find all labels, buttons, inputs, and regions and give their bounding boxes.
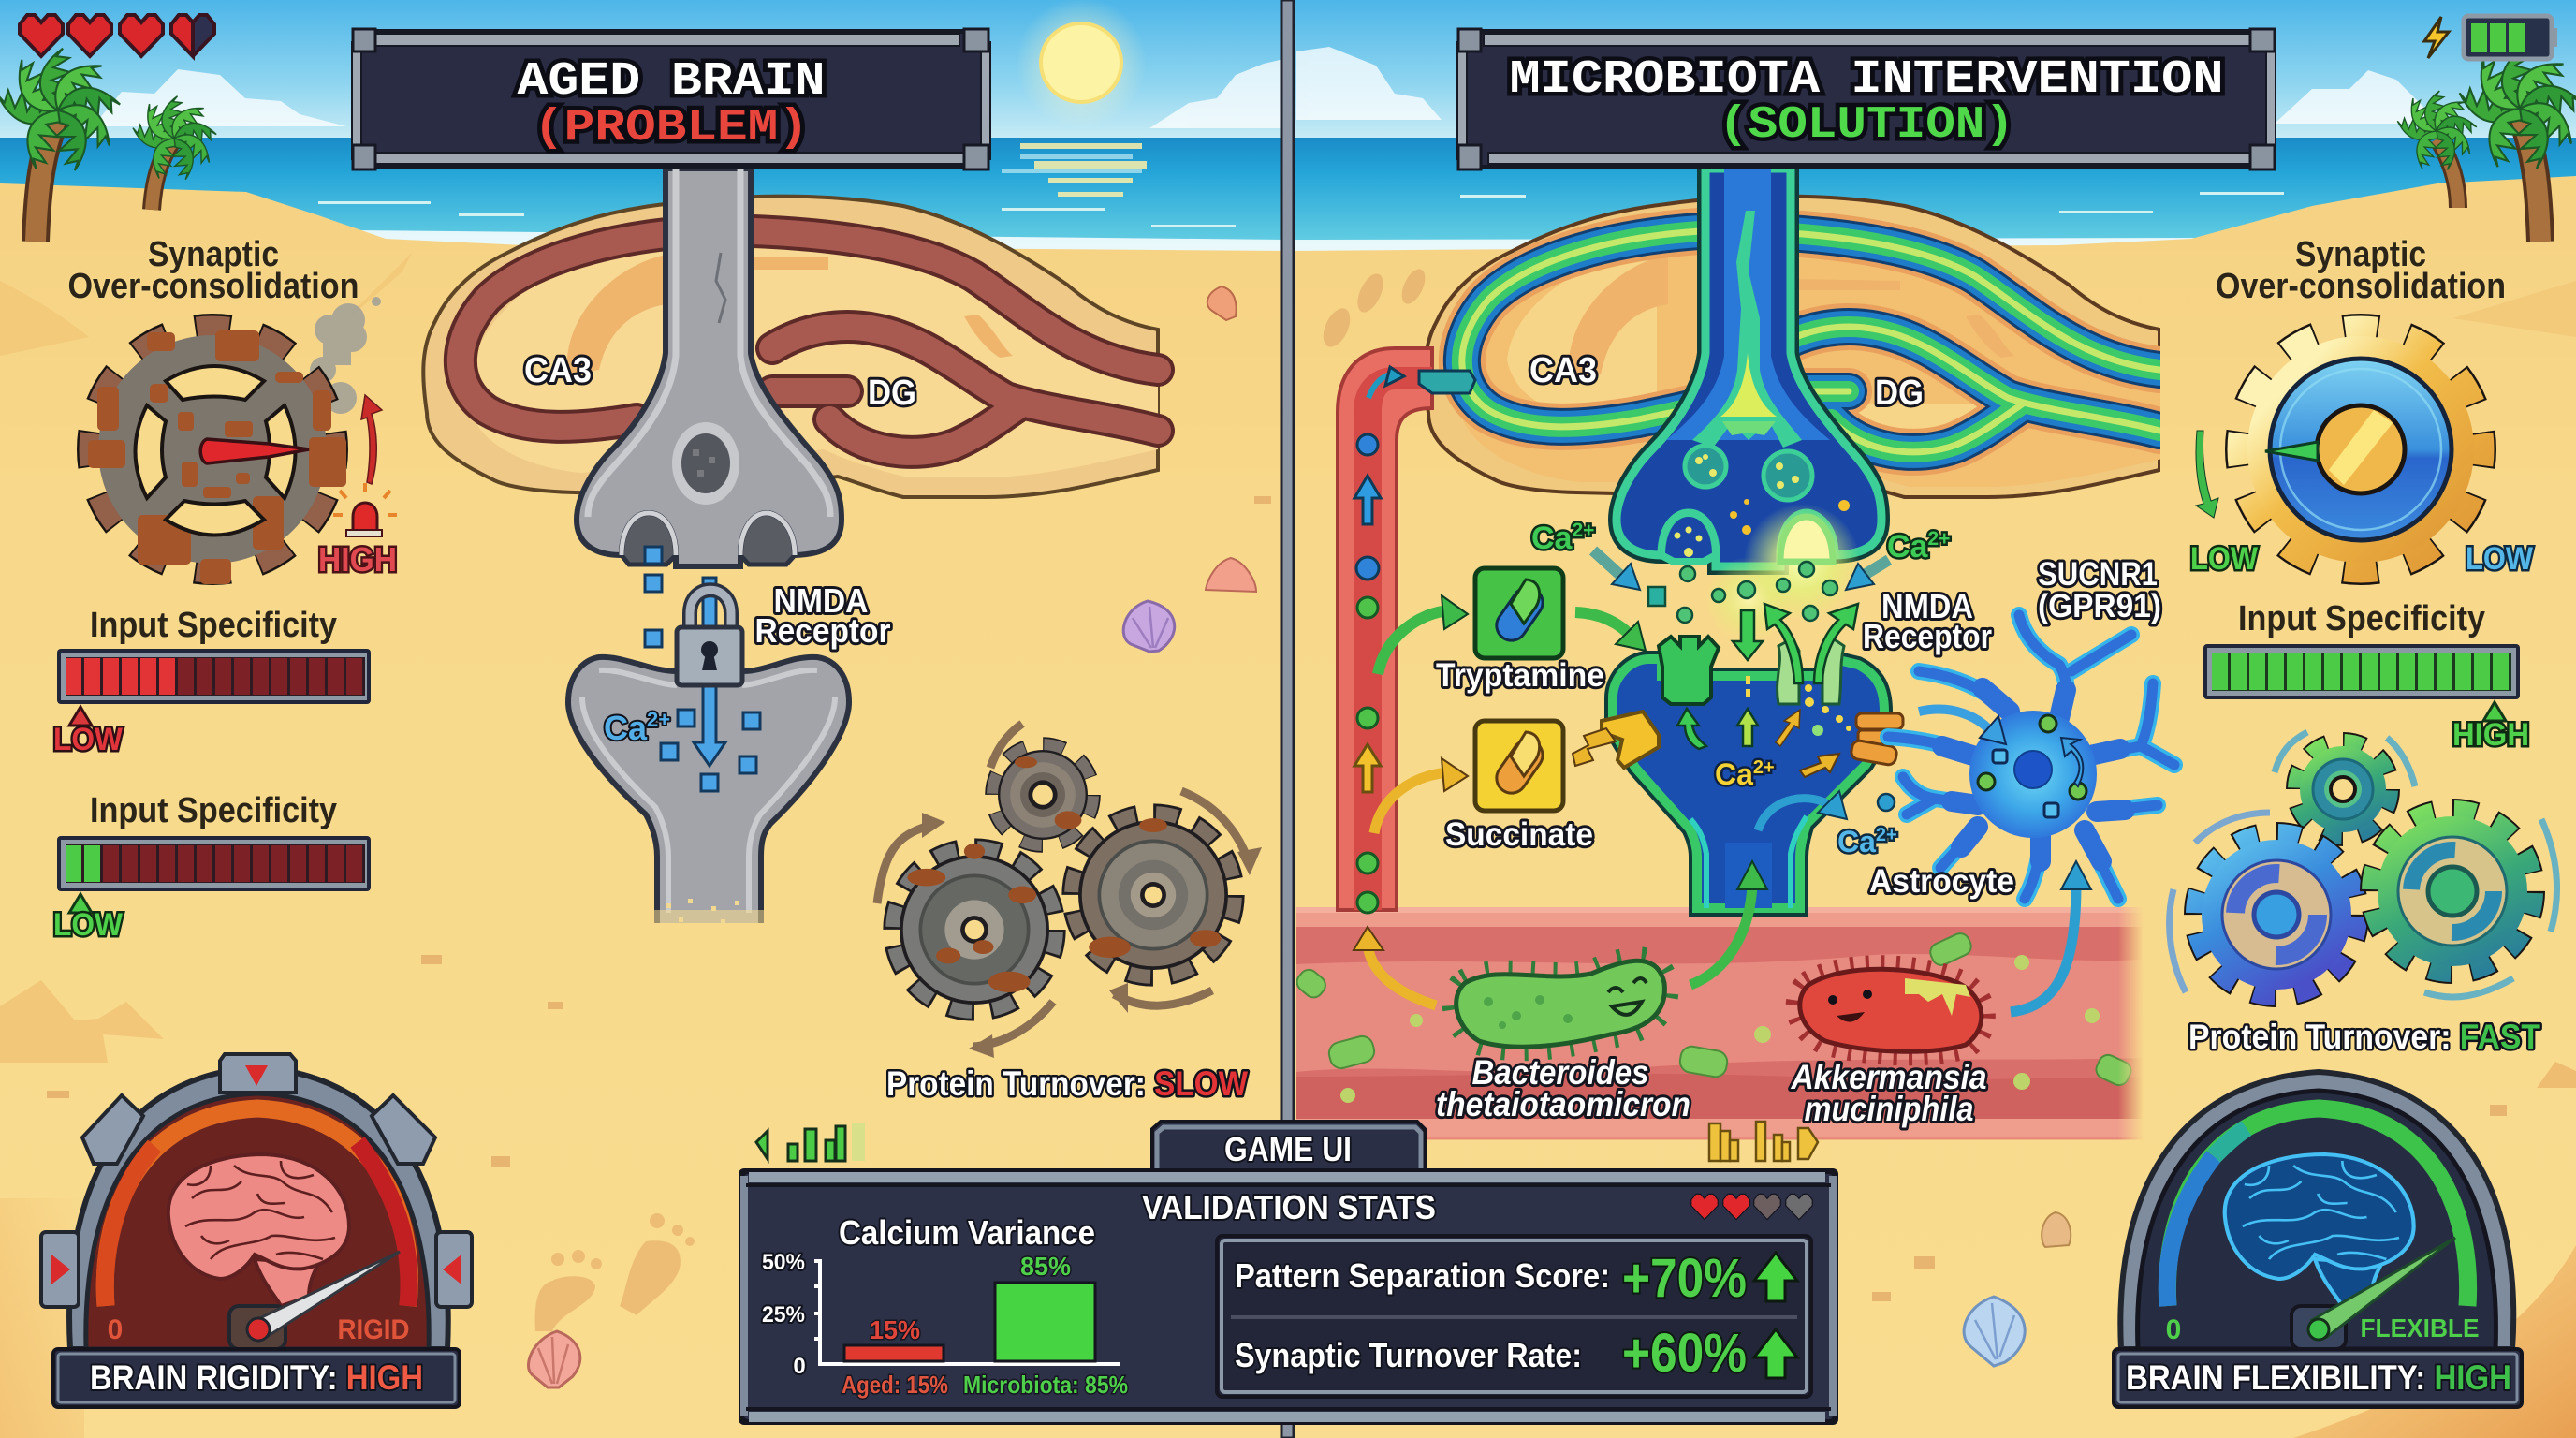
calcium dot xyxy=(1878,794,1895,811)
gauge: brain flexibility xyxy=(2120,1072,2513,1349)
icon: rusty gauge gear left xyxy=(88,327,346,584)
astrocyte xyxy=(1888,615,2174,899)
icon: green sound bars xyxy=(756,1123,865,1161)
label: Akkermansia muciniphila xyxy=(1791,1058,1986,1128)
arrows: calcium into synapse xyxy=(1593,550,1889,590)
label: Bacteroides thetaiotaomicron: thetaiotaomicron xyxy=(1436,1085,1690,1123)
label: Ca2+ green right: Ca xyxy=(1887,529,1927,565)
tab: GAME UI xyxy=(1152,1122,1425,1170)
presynaptic terminal: restored blue xyxy=(1617,169,1881,566)
label: Synaptic Over-consolidation right: Synaptic xyxy=(2295,235,2426,274)
label: Ca2+ green left: Ca xyxy=(1531,521,1572,556)
sub-heading: PROBLEM: (PROBLEM) xyxy=(534,103,809,154)
label: Succinate: Succinate xyxy=(1445,816,1593,853)
icon: padlock xyxy=(677,590,742,685)
icon: pink shell middle xyxy=(1206,558,1256,592)
panel: score box: Synaptic Turnover Rate: xyxy=(1235,1336,1582,1374)
yellow-orange receptor cluster xyxy=(1602,712,1903,768)
label: Tryptamine: Tryptamine xyxy=(1436,657,1604,694)
label: Input Specificity 2: Input Specificity xyxy=(90,791,337,830)
arrow: green down xyxy=(2196,431,2218,518)
heading: AGED BRAIN: AGED BRAIN xyxy=(517,55,826,109)
icon: alarm siren xyxy=(333,483,397,536)
icon: pink brain xyxy=(168,1154,349,1306)
icon: glowing blue brain xyxy=(2225,1154,2414,1306)
label: Ca2+ left: Ca xyxy=(604,709,647,747)
panel: score box xyxy=(1217,1236,1811,1397)
gauge needle and scale labels flexible xyxy=(2166,1238,2479,1349)
arrow: yellow bacteria to vessel xyxy=(1354,927,1436,1005)
gauge needle and scale labels flexible: 0 xyxy=(2166,1314,2181,1345)
chart: calcium variance: 15% xyxy=(870,1315,920,1344)
label: NMDA Receptor left xyxy=(754,581,891,650)
marker and label: HIGH green xyxy=(2452,702,2529,753)
icon: orange shell top xyxy=(1208,286,1237,320)
arrows: green in synapse xyxy=(1677,604,1858,749)
label box: brain rigidity high: BRAIN RIGIDITY: HIGH xyxy=(90,1358,423,1397)
label: DG right: DG xyxy=(1875,374,1924,413)
vessel cargo: dots and arrows xyxy=(1354,367,1475,913)
bacterium: Akkermansia muciniphila xyxy=(1800,969,1982,1051)
label: Synaptic Over-consolidation right xyxy=(2216,235,2506,306)
hippocampus left xyxy=(423,197,1158,497)
label: SUCNR1 GPR91 xyxy=(2038,556,2161,624)
icon: succinate pill xyxy=(1475,721,1563,811)
label: Protein Turnover SLOW: Protein Turnover: SLOW xyxy=(886,1064,1248,1103)
icon: yellow sound bars xyxy=(1709,1122,1818,1161)
icon: pink shell bottom left xyxy=(528,1331,580,1387)
label: Synaptic Over-consolidation left: Synaptic xyxy=(148,235,279,274)
tab: GAME UI: GAME UI xyxy=(1224,1130,1352,1168)
icon: footprints right xyxy=(1318,266,1430,351)
arrow: small yellow to receptor xyxy=(1800,754,1839,777)
panel: score box: +60% xyxy=(1622,1323,1747,1384)
panel: validation stats xyxy=(739,1168,1838,1425)
bar: input specificity low green xyxy=(57,836,371,891)
label: Synaptic Over-consolidation left xyxy=(67,235,359,306)
label: HIGH left: HIGH xyxy=(318,540,397,579)
bar: input specificity high green xyxy=(2203,644,2520,699)
chart: calcium variance: 0 xyxy=(793,1354,806,1379)
icon: tryptamine pill xyxy=(1475,568,1563,658)
sun xyxy=(1016,0,1147,128)
synaptic glow and vesicle release xyxy=(1648,504,1860,641)
label box: brain flexibility high xyxy=(2114,1349,2522,1407)
label: Akkermansia muciniphila: Akkermansia xyxy=(1791,1058,1986,1096)
icon: footprints left xyxy=(535,1213,695,1331)
label: Input Specificity right: Input Specificity xyxy=(2238,599,2485,638)
title panel: microbiota intervention xyxy=(1457,29,2276,169)
label: DG left: DG xyxy=(868,374,916,413)
label: Bacteroides thetaiotaomicron: Bacteroides xyxy=(1471,1053,1649,1092)
gut lining with bacteria xyxy=(1294,910,2144,1138)
arrow: yellow up to channel xyxy=(1776,710,1800,746)
label: Ca2+ yellow in post-synapse: 2+ xyxy=(1753,757,1775,778)
gauge needle and scale labels flexible: FLEXIBLE xyxy=(2361,1313,2479,1343)
blood vessel xyxy=(1338,348,1432,910)
palm trees right xyxy=(2395,47,2576,242)
light green receptor channel xyxy=(1778,638,1844,704)
heading: MICROBIOTA INTERVENTION: MICROBIOTA INTERVENTION xyxy=(1509,53,2224,107)
presynaptic terminal: aged grey xyxy=(577,169,842,566)
arrow: green tryptamine to receptor xyxy=(1575,612,1646,651)
label: Ca2+ yellow in post-synapse: Ca xyxy=(1715,757,1753,791)
label box: brain rigidity high xyxy=(53,1349,460,1407)
label: Input Specificity 1: Input Specificity xyxy=(90,606,337,645)
label: Synaptic Over-consolidation right: Over-consolidation xyxy=(2216,267,2506,306)
chart: calcium variance: 85% xyxy=(1020,1252,1071,1281)
arrow: green bacteria to synapse xyxy=(1690,861,1767,985)
label: NMDA Receptor right xyxy=(1863,587,1992,655)
icon: purple shell xyxy=(1123,601,1175,652)
label: LOW green gear: LOW xyxy=(2190,541,2259,577)
postsynaptic terminal: aged grey xyxy=(568,657,849,934)
arrow: receptor to astrocyte xyxy=(1919,710,2006,744)
arrow: blue bacteria to astrocyte xyxy=(2011,861,2091,1012)
panel: score box: +70% xyxy=(1622,1248,1747,1309)
label: Protein Turnover FAST: Protein Turnover: FAST xyxy=(2188,1018,2540,1056)
label: Ca2+ green right: 2+ xyxy=(1927,528,1950,550)
center divider xyxy=(1281,0,1294,1438)
label: CA3 left: CA3 xyxy=(524,351,592,390)
bar: input specificity low red xyxy=(57,649,371,704)
arrow: yellow succinate to receptor xyxy=(1573,728,1616,766)
gauge needle and scale labels rigid: 0 xyxy=(108,1314,123,1345)
arrow: blue curve xyxy=(1758,791,1847,830)
label: NMDA Receptor left: Receptor xyxy=(754,611,891,650)
chart: calcium variance: Microbiota: 85% xyxy=(963,1371,1128,1399)
icon: hearts lives xyxy=(20,15,214,56)
label: Ca2+ blue: 2+ xyxy=(1876,825,1897,845)
title panel: aged brain xyxy=(352,29,990,169)
icon: tan rock xyxy=(2042,1212,2071,1247)
hippocampus right xyxy=(1425,197,2162,497)
chart: calcium variance xyxy=(762,1213,1128,1399)
icon: blue shell bottom xyxy=(1964,1297,2025,1366)
label box: brain flexibility high: BRAIN FLEXIBILITY: HIGH xyxy=(2126,1358,2511,1397)
label: CA3 right: CA3 xyxy=(1530,351,1597,390)
panel: score box: Pattern Separation Score: xyxy=(1235,1256,1610,1295)
green receptor xyxy=(1659,637,1719,704)
marker and label: LOW red: LOW xyxy=(53,722,124,757)
icon: golden gauge gear right xyxy=(2238,327,2483,572)
icon: smoke xyxy=(282,297,381,432)
icon: stat hearts xyxy=(1691,1194,1812,1220)
icon: rusty turnover gears xyxy=(877,724,1262,1058)
gauge needle and scale labels rigid: RIGID xyxy=(337,1314,410,1345)
marker and label: LOW red xyxy=(53,707,124,757)
gauge needle and scale labels rigid xyxy=(108,1252,410,1349)
arrow: yellow to succinate xyxy=(1374,758,1468,833)
chart: calcium variance: Aged: 15% xyxy=(842,1371,948,1399)
label: NMDA Receptor right: NMDA xyxy=(1881,587,1973,625)
chart: calcium variance: 25% xyxy=(762,1302,805,1328)
marker and label: LOW green: LOW xyxy=(53,907,124,943)
icon: battery and bolt xyxy=(2424,16,2557,59)
label: Bacteroides thetaiotaomicron xyxy=(1436,1053,1690,1123)
bacterium: Bacteroides thetaiotaomicron xyxy=(1456,961,1664,1047)
heading: VALIDATION STATS: VALIDATION STATS xyxy=(1142,1188,1436,1226)
label: Ca2+ green left: 2+ xyxy=(1572,520,1594,541)
blue ion arrow and calcium particles, aged xyxy=(645,547,760,791)
label: NMDA Receptor left: NMDA xyxy=(773,581,869,620)
label: Ca2+ blue: Ca xyxy=(1837,825,1876,858)
label: Astrocyte: Astrocyte xyxy=(1869,863,2014,900)
gauge: brain rigidity xyxy=(41,1054,472,1349)
label: SUCNR1 GPR91: SUCNR1 xyxy=(2038,556,2158,593)
marker and label: HIGH green: HIGH xyxy=(2452,717,2529,753)
label: LOW blue gear: LOW xyxy=(2466,541,2534,577)
sub-heading: SOLUTION: (SOLUTION) xyxy=(1719,100,2014,151)
palm trees left xyxy=(0,49,217,242)
icon: healthy turnover gears xyxy=(2170,732,2557,997)
label: SUCNR1 GPR91: (GPR91) xyxy=(2038,588,2161,624)
postsynaptic terminal: restored blue xyxy=(1613,659,1884,908)
label: NMDA Receptor right: Receptor xyxy=(1863,617,1992,655)
label: Ca2+ left: 2+ xyxy=(647,708,670,731)
label: Akkermansia muciniphila: muciniphila xyxy=(1805,1090,1973,1128)
chart: calcium variance: 50% xyxy=(762,1250,805,1275)
arrow: red up xyxy=(361,395,382,484)
arrow: green to tryptamine xyxy=(1378,595,1468,674)
label: Synaptic Over-consolidation left: Over-consolidation xyxy=(67,267,359,306)
chart: calcium variance: Calcium Variance xyxy=(839,1213,1095,1252)
